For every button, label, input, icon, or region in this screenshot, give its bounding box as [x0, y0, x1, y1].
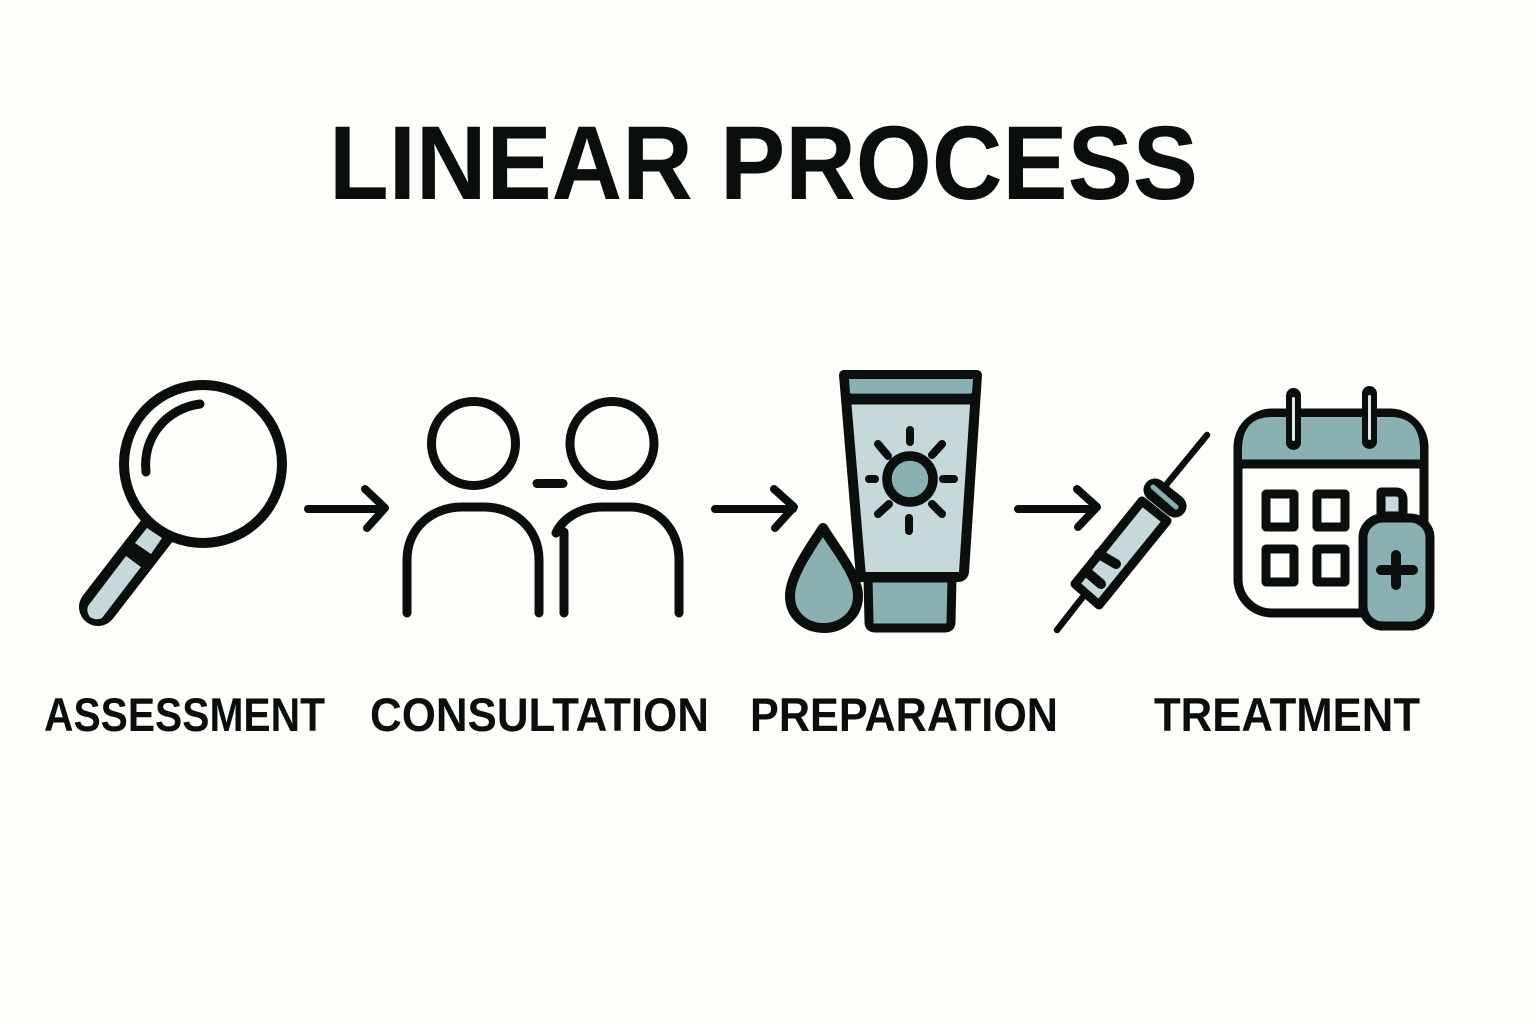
icon: sunscreen tube and drop: [790, 375, 977, 628]
icon: syringe: [1057, 435, 1207, 630]
icon: two people in consultation: [407, 402, 679, 613]
bottle neck: [1381, 492, 1403, 516]
calendar rings: [1286, 386, 1377, 450]
calendar date squares: [1266, 494, 1345, 582]
title: LINEAR PROCESS: [329, 105, 1198, 222]
water drop: [790, 528, 858, 628]
label: treatment: TREATMENT: [1154, 688, 1420, 741]
tube body: [844, 375, 977, 577]
bottle body: [1363, 518, 1430, 626]
icon: magnifying glass: [87, 385, 282, 619]
calendar page: [1238, 413, 1424, 613]
icon: calendar with bottle: [1236, 386, 1430, 626]
arrow: consultation to preparation: [715, 489, 794, 528]
plus sign: [1381, 555, 1413, 585]
arrow: assessment to consultation: [308, 489, 385, 528]
tube cap: [868, 578, 952, 628]
label: preparation: PREPARATION: [750, 688, 1058, 741]
label: assessment: ASSESSMENT: [44, 688, 325, 741]
label: consultation: CONSULTATION: [370, 688, 709, 741]
arrow: preparation to treatment: [1018, 489, 1097, 527]
calendar header: [1242, 417, 1420, 460]
sun: [869, 430, 954, 531]
